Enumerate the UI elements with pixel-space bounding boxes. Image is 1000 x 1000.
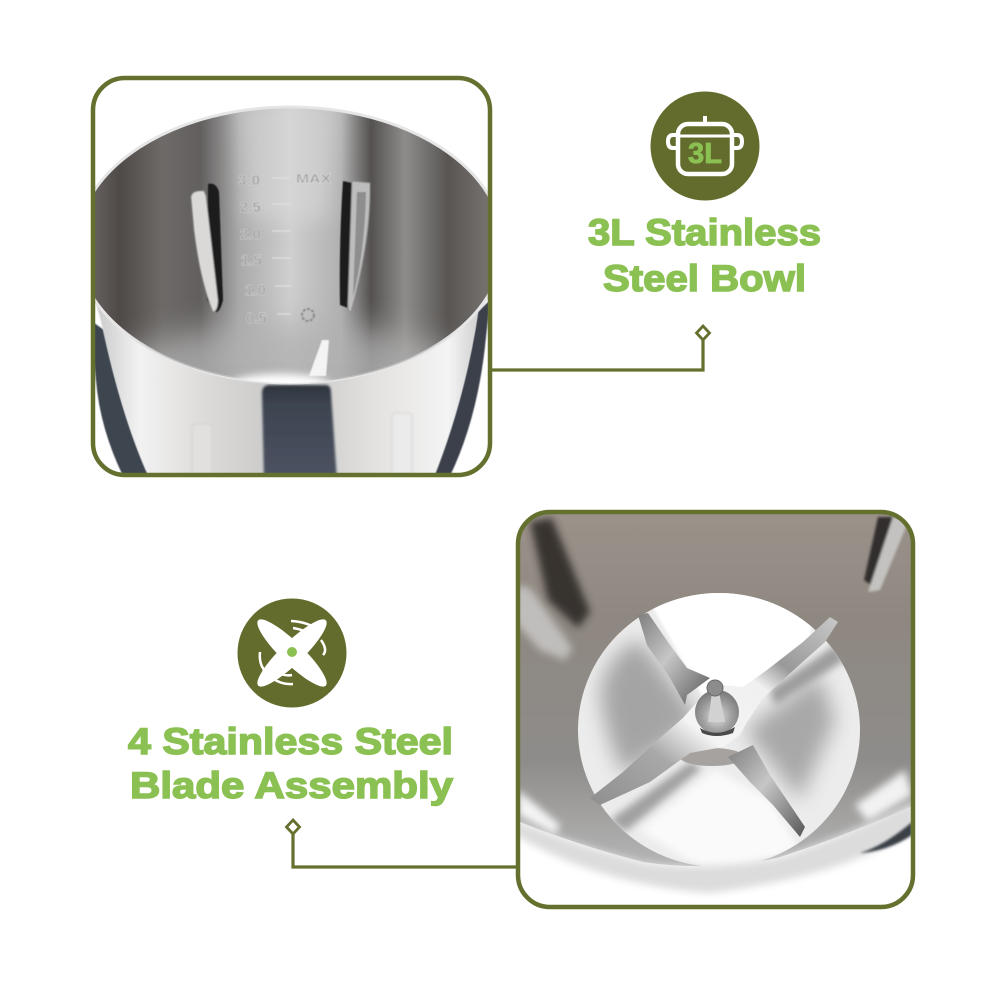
blade: knob [707,680,723,696]
connector: blade callout arrow [286,820,518,867]
right lower reflection [855,770,912,822]
measurement scale: 0.5 [246,310,267,327]
panel borders [93,78,913,907]
bright floor sector bottom [645,773,797,865]
pot outline [668,116,742,174]
measurement scale: 1.0 [245,282,266,299]
icon: pot badge [650,92,760,200]
right inner slot [340,181,370,312]
interior floor reflection [130,311,450,383]
right upper slot [864,517,908,592]
grey shadow streak lower left [610,762,702,832]
left upper dark slot [530,518,590,628]
grey floor sector left [600,640,700,775]
dark base at right [860,822,912,853]
lower body recess left [192,424,212,480]
crossed blades [251,612,333,694]
bowl floor [578,593,860,866]
pot capacity label: 3L [688,138,722,170]
lower body recess right [392,413,412,479]
heading: 4 Stainless Steel Blade Assembly: Blade Assembly [130,765,453,806]
blade: lower right [728,745,805,837]
blade: stem [708,692,725,722]
bright floor sector top [653,593,812,696]
blade: hub cone [695,690,739,734]
blade: upper left [638,613,710,705]
measurement scale: 1.5 [241,252,262,269]
left dark base edge [95,323,148,473]
right dark base edge [435,301,488,473]
measurement scale [238,171,331,327]
handle [262,385,337,480]
left inner slot [191,184,223,312]
icon: blade badge [238,598,346,708]
heading: 3L Stainless Steel Bowl: 3L Stainless [588,212,821,253]
heading: 3L Stainless Steel Bowl [588,212,821,299]
left lower light slot [515,585,572,660]
grey floor sector right [745,675,835,800]
white lower area [515,840,915,910]
inner wall of bowl [515,510,915,866]
inner blade tip [309,340,329,376]
heading: 3L Stainless Steel Bowl: Steel Bowl [603,258,806,299]
blade hub dot [287,647,297,657]
panel: blade assembly photo [515,510,915,910]
grey shadow streak right [770,645,845,705]
bowl interior [77,107,503,383]
measurement scale: 2.5 [240,199,261,216]
measurement scale: MAX [296,171,331,186]
measurement scale: 3.0 [238,172,261,189]
blade: hub nut [700,727,735,736]
interior top glow [235,100,340,220]
heading: 4 Stainless Steel Blade Assembly: 4 Stainless Steel [128,721,453,762]
bowl rim at bottom [515,800,915,893]
measurement scale: 2.0 [240,226,261,243]
blade: main plate [590,617,838,805]
blade: under disk [681,748,738,766]
bowl outer body [96,305,479,473]
panel: stainless steel bowl photo [95,106,488,473]
heading: 4 Stainless Steel Blade Assembly [128,721,453,806]
left lower reflection [518,790,560,835]
motion arcs [260,621,325,684]
connector: bowl callout arrow [490,326,710,370]
